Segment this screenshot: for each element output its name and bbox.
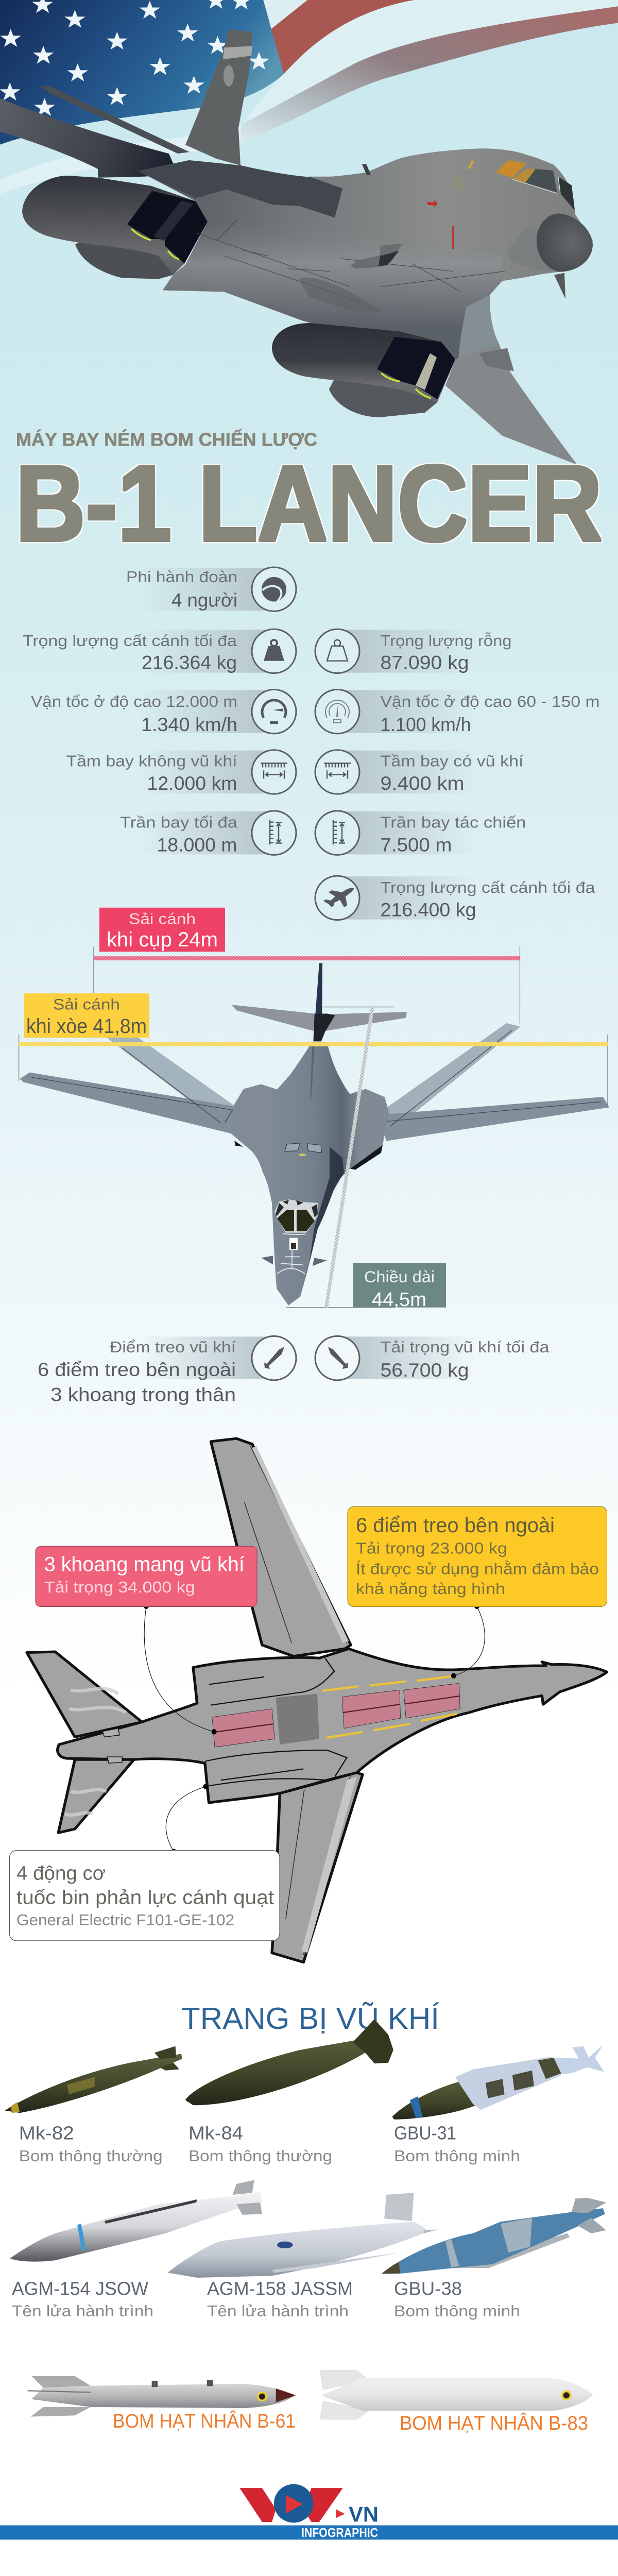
spec: takeoff weight bbox=[315, 876, 595, 921]
spec: max takeoff weight: Trọng lượng cất cánh tối đa bbox=[23, 632, 237, 650]
callout: engines: 4 động cơ bbox=[16, 1863, 106, 1885]
weapon labels: AGM-154 JSOW bbox=[12, 2279, 148, 2299]
spec: speed at 12000 m: 1.340 km/h bbox=[141, 714, 237, 735]
weapon labels bbox=[12, 2123, 588, 2434]
spec: max payload: Tải trọng vũ khí tối đa bbox=[380, 1338, 550, 1356]
canopy windows bbox=[496, 160, 527, 178]
label: length bbox=[353, 1263, 446, 1311]
weapon drawings bbox=[5, 2019, 606, 2419]
spec: range armed: Tầm bay có vũ khí bbox=[380, 752, 524, 770]
top view aircraft bbox=[20, 963, 609, 1306]
spec: range unarmed: 12.000 km bbox=[147, 773, 237, 794]
nose cone bbox=[537, 213, 593, 272]
spec: max takeoff weight: 216.364 kg bbox=[142, 652, 237, 673]
callout: external hardpoints: Tải trọng 23.000 kg bbox=[356, 1539, 507, 1557]
Mk-84 bomb bbox=[185, 2019, 393, 2105]
American flag backdrop bbox=[0, 0, 618, 194]
spec: hardpoints: Điểm treo vũ khí bbox=[110, 1338, 236, 1356]
callout: engines bbox=[9, 1851, 280, 1941]
label: folded wingspan: khi cụp 24m bbox=[107, 928, 218, 951]
label: folded wingspan bbox=[99, 908, 225, 952]
weapon labels: Bom thông thường bbox=[19, 2147, 163, 2165]
weapon labels: BOM HẠT NHÂN B-61 bbox=[113, 2410, 296, 2432]
markings bbox=[427, 200, 438, 207]
weapons heading: TRANG BỊ VŨ KHÍ bbox=[181, 2001, 439, 2036]
weapon labels: Bom thông minh bbox=[394, 2147, 520, 2165]
weapon labels: Bom thông thường bbox=[188, 2147, 332, 2165]
panel: hero bbox=[0, 0, 618, 564]
footer: publisher logo: INFOGRAPHIC bbox=[301, 2526, 378, 2540]
callout: external hardpoints: Ít được sử dụng nhằm đảm bảo bbox=[356, 1560, 599, 1578]
spec: hardpoints bbox=[38, 1336, 296, 1405]
bar: extended wingspan bbox=[19, 1042, 608, 1046]
callout: weapon bays: Tải trọng 34.000 kg bbox=[44, 1578, 195, 1596]
weapon labels: Tên lửa hành trình bbox=[12, 2302, 153, 2320]
spec: crew: Phi hành đoàn bbox=[126, 568, 237, 586]
callout: external hardpoints bbox=[348, 1506, 607, 1607]
panel: weapons bbox=[5, 2001, 606, 2434]
spec: max ceiling: Trần bay tối đa bbox=[120, 814, 238, 832]
spec: empty weight: 87.090 kg bbox=[380, 652, 469, 673]
footer: publisher logo: VN bbox=[349, 2502, 379, 2527]
spec: combat ceiling: Trần bay tác chiến bbox=[380, 814, 526, 832]
Mk-82 bomb bbox=[5, 2046, 182, 2113]
left nacelles bbox=[75, 230, 173, 279]
weapon labels: Mk-84 bbox=[188, 2123, 243, 2143]
weapon labels: BOM HẠT NHÂN B-83 bbox=[400, 2412, 588, 2434]
spec: max payload bbox=[315, 1336, 550, 1381]
spec: speed at 60-150 m: 1.100 km/h bbox=[380, 714, 471, 735]
spec: crew: 4 người bbox=[171, 590, 237, 611]
callout: engines: tuốc bin phản lực cánh quạt bbox=[16, 1887, 274, 1908]
main fuselage bbox=[138, 148, 593, 360]
length indicator bbox=[286, 1007, 394, 1308]
callout: weapon bays bbox=[36, 1546, 257, 1607]
GBU-38 bomb bbox=[382, 2198, 606, 2274]
weapon labels: Mk-82 bbox=[19, 2123, 74, 2143]
label: folded wingspan: Sải cánh bbox=[129, 911, 196, 927]
subtitle: MÁY BAY NÉM BOM CHIẾN LƯỢC bbox=[16, 430, 317, 450]
label: length: 44,5m bbox=[372, 1289, 426, 1311]
spec: max ceiling: 18.000 m bbox=[157, 835, 237, 855]
weapon labels: GBU-38 bbox=[394, 2279, 462, 2299]
spec: range armed bbox=[315, 750, 524, 794]
spec: speed at 60-150 m: Vận tốc ở độ cao 60 - 150 m bbox=[380, 692, 599, 710]
spec: range unarmed: Tầm bay không vũ khí bbox=[66, 752, 237, 770]
spec: empty weight: Trọng lượng rỗng bbox=[380, 632, 512, 650]
label: extended wingspan: Sải cánh bbox=[53, 996, 120, 1013]
weapon labels: GBU-31 bbox=[394, 2123, 456, 2143]
spec: range unarmed bbox=[66, 750, 296, 794]
spec: max ceiling bbox=[120, 811, 296, 855]
spec: takeoff weight: 216.400 kg bbox=[380, 900, 476, 921]
spec: takeoff weight: Trọng lượng cất cánh tối đa bbox=[380, 878, 595, 896]
wingspan guide lines bbox=[19, 946, 608, 1107]
spec: crew bbox=[126, 567, 296, 611]
antenna and pitot bbox=[362, 164, 371, 175]
weapon labels: AGM-158 JASSM bbox=[207, 2279, 353, 2299]
hero aircraft B-1 bbox=[0, 30, 593, 465]
callout: weapon bays: 3 khoang mang vũ khí bbox=[44, 1553, 245, 1575]
panel: planform diagram bbox=[9, 1438, 607, 1962]
spec: max takeoff weight bbox=[23, 629, 296, 673]
spec: hardpoints: 3 khoang trong thân bbox=[50, 1384, 236, 1405]
AGM-154 JSOW missile bbox=[10, 2180, 262, 2262]
label: length: Chiều dài bbox=[364, 1267, 435, 1286]
bar: folded wingspan bbox=[94, 956, 520, 960]
callout: engines: General Electric F101-GE-102 bbox=[16, 1911, 234, 1929]
pod bbox=[351, 244, 402, 269]
spec: empty weight bbox=[315, 629, 512, 673]
label: extended wingspan: khi xòe 41,8m bbox=[26, 1015, 147, 1038]
callout: external hardpoints: khả năng tàng hình bbox=[356, 1580, 505, 1598]
GBU-31 bomb bbox=[392, 2045, 604, 2120]
weapon labels: Bom thông minh bbox=[394, 2302, 520, 2320]
panel: wingspan and length diagram bbox=[19, 908, 609, 1311]
label: extended wingspan bbox=[24, 993, 149, 1038]
spec: hardpoints: 6 điểm treo bên ngoài bbox=[38, 1359, 236, 1380]
footer: publisher logo bbox=[0, 2484, 618, 2540]
spec: combat ceiling: 7.500 m bbox=[380, 835, 452, 855]
panel: specifications bbox=[23, 567, 599, 921]
B-61 nuclear bomb bbox=[28, 2376, 296, 2417]
B-83 nuclear bomb bbox=[320, 2370, 593, 2419]
right nacelles bbox=[329, 368, 437, 417]
spec: combat ceiling bbox=[315, 811, 526, 855]
spec: range armed: 9.400 km bbox=[380, 773, 465, 794]
spec: speed at 12000 m: Vận tốc ở độ cao 12.000 m bbox=[31, 692, 237, 710]
spec: max payload: 56.700 kg bbox=[380, 1360, 469, 1381]
right wing bbox=[445, 344, 577, 465]
spec: speed at 12000 m bbox=[31, 689, 296, 735]
panel: armament stats bbox=[38, 1336, 550, 1405]
callout: external hardpoints: 6 điểm treo bên ngoài bbox=[356, 1514, 555, 1537]
weapon labels: Tên lửa hành trình bbox=[207, 2302, 349, 2320]
AGM-158 JASSM missile bbox=[167, 2193, 438, 2278]
spec: speed at 60-150 m bbox=[315, 689, 599, 735]
planform aircraft bbox=[27, 1438, 607, 1962]
